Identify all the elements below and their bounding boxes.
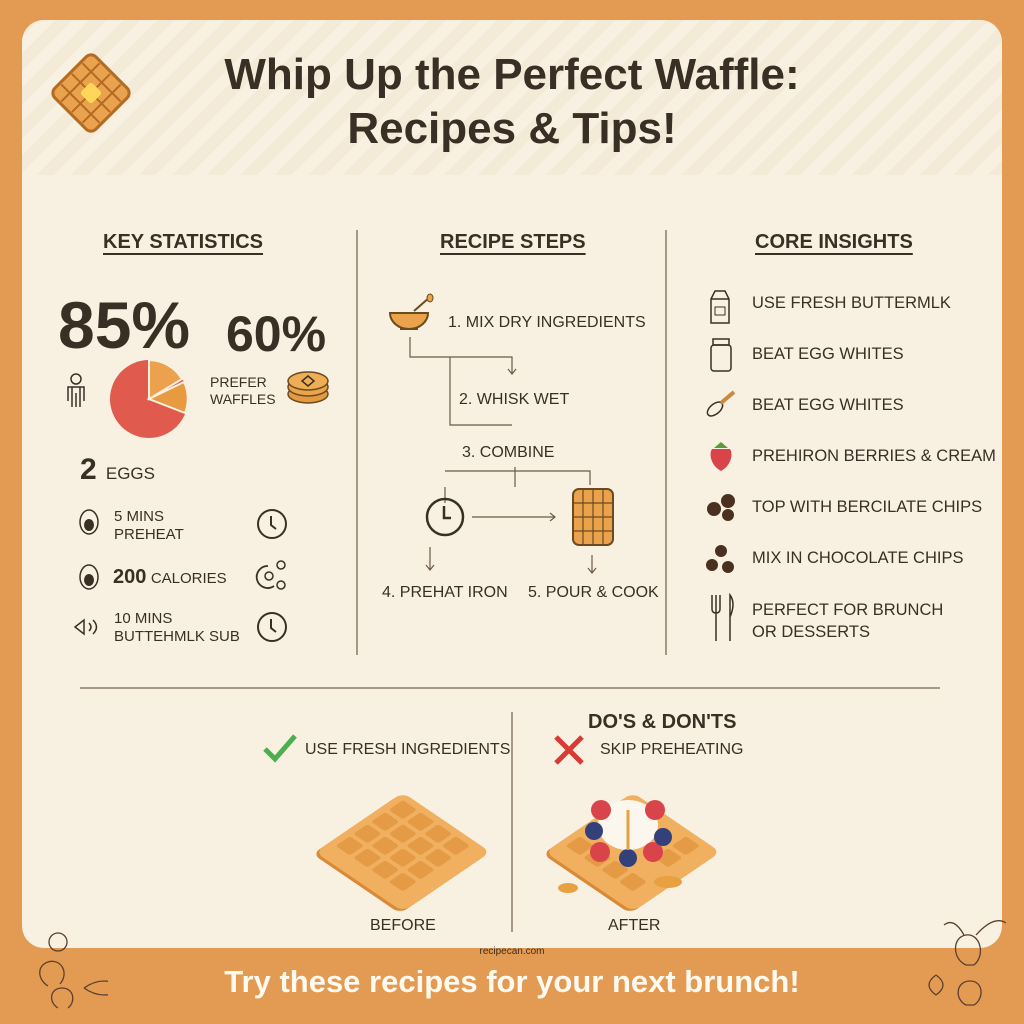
step 2: 2. WHISK WET [459,391,569,408]
stat 10 mins buttermilk sub [114,610,240,645]
panel: core insights [706,231,996,641]
flow arrows [409,337,596,574]
dont: skip preheating: SKIP PREHEATING [600,741,743,758]
label before: BEFORE [370,917,436,934]
stat 5 mins preheat: PREHEAT [114,526,184,543]
insight 1: USE FRESH BUTTERMLK [752,294,951,312]
icon: fork and knife [711,593,734,641]
label prefer waffles [210,374,276,407]
label prefer waffles: PREFER [210,374,267,390]
icon: person [67,373,85,407]
icon: speaker [74,618,98,636]
insight 7: OR DESSERTS [752,623,870,641]
heading: core insights: CORE INSIGHTS [755,231,913,253]
step 3: 3. COMBINE [462,444,554,461]
stat 200 calories: 200 CALORIES [113,566,227,588]
stat 10 mins buttermilk sub: BUTTEHMLK SUB [114,628,240,645]
footer call to action: Try these recipes for your next brunch! [224,964,800,999]
title: Whip Up the Perfect Waffle: [224,50,800,99]
icon: egg [79,509,99,535]
panel: key statistics [58,231,329,645]
icon: mixing bowl [389,294,434,330]
icon: waffle iron [572,488,614,546]
insight 5: TOP WITH BERCILATE CHIPS [752,498,982,516]
insight 2: BEAT EGG WHITES [752,345,904,363]
icon: waffle stack [287,371,329,404]
stat 5 mins preheat [114,508,184,543]
label after: AFTER [608,917,660,934]
icon: clock [257,509,287,539]
insight 7 [752,601,943,641]
heading: dos and donts: DO'S & DON'TS [588,711,736,733]
insight 6: MIX IN CHOCOLATE CHIPS [752,549,963,567]
decoration: strawberries right [928,920,1006,1006]
icon: check [263,734,297,763]
stat 60%: 60% [226,306,326,362]
step 1: 1. MIX DRY INGREDIENTS [448,314,646,331]
icon: chocolate chips [706,545,734,573]
icon: milk carton [710,290,730,324]
insight 4: PREHIRON BERRIES & CREAM [752,447,996,465]
icon: egg [79,564,99,590]
icon: clock [426,498,464,536]
icon: clock [257,612,287,642]
insight 7: PERFECT FOR BRUNCH [752,601,943,619]
icon: jar [710,338,732,372]
icon: calories [256,560,286,590]
title: Recipes & Tips! [347,104,677,153]
icon: whisk [706,390,736,417]
stat 85%: 85% [58,288,190,362]
pie chart [110,360,187,438]
insight 3: BEAT EGG WHITES [752,396,904,414]
icon: chocolate chips [707,494,735,521]
icon: strawberry [710,442,732,471]
stat 5 mins preheat: 5 MINS [114,508,164,525]
waffle after with toppings [546,795,716,911]
panel: dos and donts [263,711,743,934]
waffle before [316,795,486,911]
panel: recipe steps [382,231,659,601]
heading: recipe steps: RECIPE STEPS [440,231,586,253]
step 5: 5. POUR & COOK [528,584,659,601]
do: fresh ingredients: USE FRESH INGREDIENTS [305,741,510,758]
label prefer waffles: WAFFLES [210,391,276,407]
stat 10 mins buttermilk sub: 10 MINS [114,610,172,627]
icon: cross [554,735,584,765]
icon: waffle logo [51,53,131,133]
decoration: strawberries left [39,932,108,1008]
stat 2 eggs: 2 EGGS [80,453,155,486]
heading: key statistics: KEY STATISTICS [103,231,263,253]
title [224,50,800,153]
step 4: 4. PREHAT IRON [382,584,508,601]
header band [22,20,1002,175]
footer source: recipecan.com [479,946,545,957]
